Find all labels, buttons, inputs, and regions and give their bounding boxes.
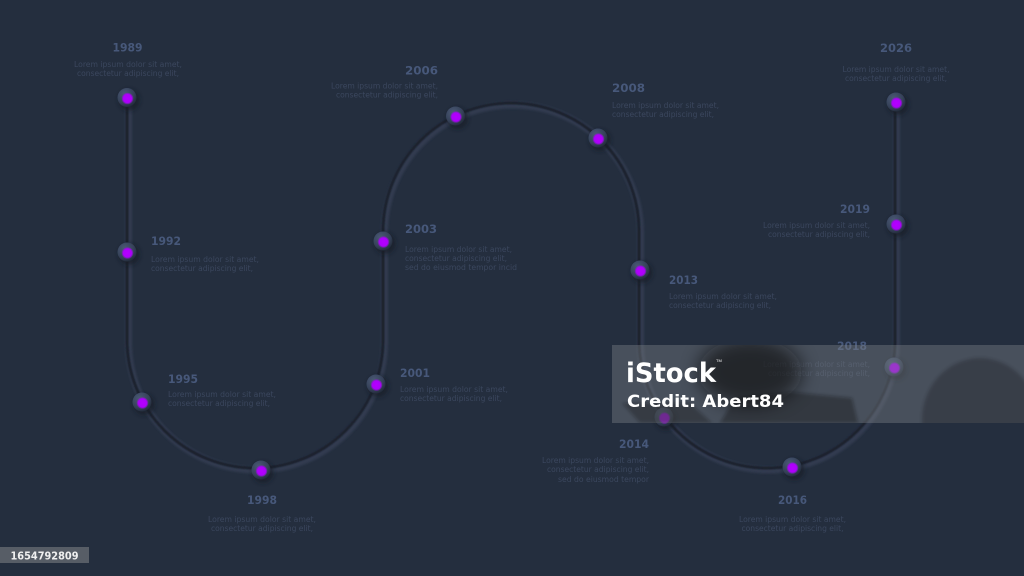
milestone 2013 <box>630 260 777 310</box>
milestone 2001: consectetur adipiscing elit, <box>400 394 502 403</box>
milestone 1995 <box>132 372 276 415</box>
milestone 2014: sed do eiusmod tempor <box>558 475 650 484</box>
milestone 2006: Lorem ipsum dolor sit amet, <box>331 82 438 90</box>
milestone 2001 <box>366 366 508 403</box>
milestone 2018: consectetur adipiscing elit, <box>768 369 870 378</box>
milestone 2019: consectetur adipiscing elit, <box>768 230 870 239</box>
milestone 2014: Lorem ipsum dolor sit amet, <box>542 456 649 465</box>
milestone 2026: consectetur adipiscing elit, <box>845 74 947 83</box>
milestone 2014: consectetur adipiscing elit, <box>547 465 649 474</box>
milestone 2026: 2026 <box>880 41 912 55</box>
image id tag: 1654792809 <box>10 550 78 562</box>
milestone 2018 <box>763 339 906 380</box>
watermark trademark: TM <box>716 358 722 363</box>
milestone 2001: Lorem ipsum dolor sit amet, <box>400 385 508 394</box>
milestone 2013: consectetur adipiscing elit, <box>669 301 771 310</box>
timeline path <box>127 98 896 470</box>
milestone 1998: 1998 <box>247 493 277 507</box>
milestone 2026: Lorem ipsum dolor sit amet, <box>842 65 950 74</box>
milestone 2006: consectetur adipiscing elit, <box>336 90 438 100</box>
milestone 2003 <box>374 222 517 272</box>
milestone 1992 <box>118 234 259 273</box>
milestone 1989: consectetur adipiscing elit, <box>77 69 179 78</box>
milestone 1989: 1989 <box>112 40 142 54</box>
milestone 2018: Lorem ipsum dolor sit amet, <box>763 360 870 369</box>
milestone 2006: 2006 <box>405 64 438 78</box>
milestone 2003: 2003 <box>405 222 437 236</box>
milestone 2018: 2018 <box>837 339 867 353</box>
milestone 2016: Lorem ipsum dolor sit amet, <box>739 515 846 524</box>
milestone 1992: 1992 <box>151 234 181 248</box>
milestone 2016: 2016 <box>778 493 807 507</box>
milestone 2003: sed do eiusmod tempor incid <box>405 263 517 272</box>
milestone 2008: Lorem ipsum dolor sit amet, <box>612 101 719 110</box>
milestone 1998: consectetur adipiscing elit, <box>211 524 313 533</box>
milestone 1998 <box>208 460 316 533</box>
milestone 2016: consectetur adipiscing elit, <box>742 524 844 533</box>
watermark logo: iStock <box>626 358 717 389</box>
milestone 1992: consectetur adipiscing elit, <box>151 264 253 273</box>
milestone 1989: Lorem ipsum dolor sit amet, <box>74 60 182 69</box>
milestone 2006 <box>331 64 468 129</box>
milestone 1995: consectetur adipiscing elit, <box>168 399 270 408</box>
milestone 1992: Lorem ipsum dolor sit amet, <box>151 255 259 264</box>
milestone 2014 <box>542 408 676 484</box>
image id tag <box>0 547 89 563</box>
milestone 2001: 2001 <box>400 366 430 380</box>
milestone 2014: 2014 <box>619 437 649 451</box>
milestone 2019: Lorem ipsum dolor sit amet, <box>763 221 870 230</box>
milestone 2003: consectetur adipiscing elit, <box>405 254 507 263</box>
milestone 2003: Lorem ipsum dolor sit amet, <box>405 245 512 254</box>
milestone 2026 <box>842 41 950 115</box>
watermark credit: Credit: Abert84 <box>627 392 784 412</box>
milestone 1998: Lorem ipsum dolor sit amet, <box>208 515 316 524</box>
milestone 2013: Lorem ipsum dolor sit amet, <box>669 292 777 301</box>
milestone 2013: 2013 <box>669 273 698 287</box>
milestone 1989 <box>74 40 182 110</box>
milestone 2008 <box>588 81 719 151</box>
milestone 2008: consectetur adipiscing elit, <box>612 110 714 119</box>
milestone 2008: 2008 <box>612 81 645 95</box>
milestone 2019: 2019 <box>840 202 870 216</box>
milestone 2019 <box>763 202 908 239</box>
watermark banner <box>612 345 1024 423</box>
milestone 1995: Lorem ipsum dolor sit amet, <box>168 390 276 399</box>
milestone 2016 <box>739 458 846 533</box>
milestone 1995: 1995 <box>168 372 198 386</box>
